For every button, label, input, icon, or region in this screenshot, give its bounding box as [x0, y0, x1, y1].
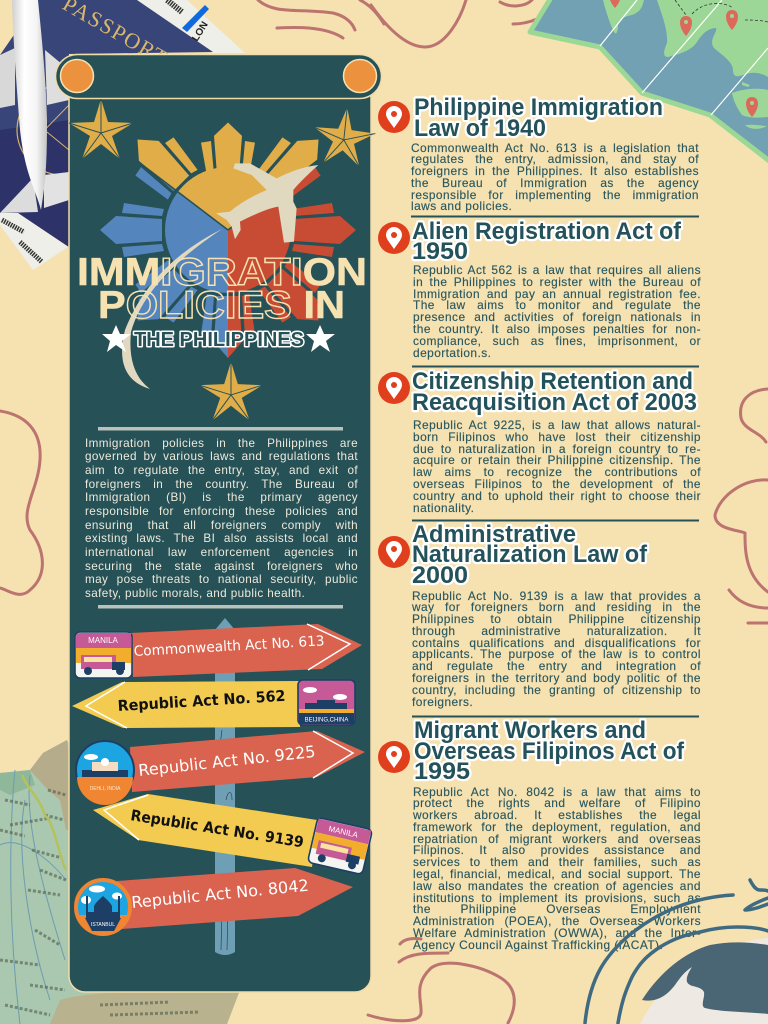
text: act 2003: acquire or retain their Philippine citizenship. The [413, 453, 701, 467]
heading 5: 1995 [414, 758, 470, 785]
heading 5 [414, 717, 685, 785]
icon: gold star bottom [200, 362, 262, 420]
icon: airplane [216, 163, 318, 243]
text: act 1940: responsible for implementing the immigration [411, 188, 699, 202]
scroll cap right button [344, 60, 376, 92]
text: act 1950: the country. It also imposes penalties for non- [413, 322, 701, 336]
map: bottom left [0, 740, 240, 1024]
text: act 1950: Republic Act 562 is a law that requires all aliens [413, 263, 701, 277]
heading 2 [412, 218, 682, 265]
text: act 2000 [412, 588, 701, 709]
text: act 2000: way for foreigners born and residing in the [412, 600, 701, 614]
text: act 1995: legal, financial, medical, and social support. The [413, 867, 701, 881]
heading 3: Reacquisition Act of 2003 [412, 389, 697, 416]
text: act 2000: foreigners. [412, 695, 473, 709]
text: act 1995: workers abroad. It establishes the legal [413, 808, 701, 822]
intro text: aim to regulate the entry, stay, and exit of [85, 464, 358, 477]
text: act 2000: Philippines to obtain Philippine citizenship [412, 612, 701, 626]
divider top [98, 427, 343, 430]
badge: manila tilted: MANILA [328, 824, 359, 840]
text: act 1950: compliance, such as fines, imprisonment, or [413, 334, 701, 348]
text: act 2000: Republic Act No. 9139 is a law that provides a [412, 588, 701, 602]
heading 1 [414, 94, 663, 142]
sign 2 [72, 681, 300, 728]
badge: delhi: DEHLI, INDIA [90, 786, 121, 792]
text: act 1950: presence and activities of foreign nationals in [413, 310, 701, 324]
text: act 2003: Republic Act 9225, is a law that allows natural- [413, 418, 701, 432]
sign 4: Republic Act No. 9139 [129, 806, 305, 851]
text: act 1950: deportation.s. [413, 346, 491, 360]
icon: location pin 1 [378, 101, 410, 133]
heading 5: Migrant Workers and [414, 717, 646, 744]
text: act 1940: regulates the entry, admission, and stay of [411, 152, 699, 166]
sign 1: Commonwealth Act No. 613 [133, 633, 325, 660]
text: act 1950: in the Philippines to register with the Bureau of [413, 275, 701, 289]
divider bottom [98, 605, 343, 608]
icon: location pin 4 [378, 536, 410, 568]
heading 1: Philippine Immigration [414, 94, 663, 121]
title: THE PHILIPPINES [134, 329, 304, 351]
text: act 1995: services to them and their families, such as [413, 855, 701, 869]
text: act 1950 [413, 263, 701, 360]
badge: delhi [76, 741, 134, 805]
heading 3 [412, 368, 697, 416]
passport and boarding passes: LON [190, 20, 211, 44]
text: act 2003: law aims to recognize the contributions of [413, 465, 701, 479]
text: act 2003 [413, 418, 701, 515]
intro text: securing the state against foreigners who [85, 560, 358, 573]
badge: manila tilted [308, 817, 372, 875]
text: act 1950: Immigration and pay an annual registration fee. [413, 287, 701, 301]
text: act 1995 [412, 784, 701, 952]
heading 4: Naturalization Law of [412, 541, 648, 568]
heading 1: Law of 1940 [414, 115, 546, 142]
intro text: safety, public morals, and public health. [85, 587, 305, 600]
text: act 1940: Commonwealth Act No. 613 is a legislation that [411, 140, 699, 154]
icon: location pin 3 [378, 372, 410, 404]
intro text: foreigners in the country. The Bureau of [85, 478, 358, 491]
passport and boarding passes [0, 0, 245, 270]
text: act 1940: foreigners in the Philippines. It also establishes [411, 164, 699, 178]
text: act 1995: framework for the deployment, regulation, and [413, 820, 701, 834]
globe bottom right [640, 938, 768, 1024]
divider rules [411, 216, 699, 716]
heading 4 [412, 521, 648, 589]
heading 4: Administrative [412, 521, 576, 548]
intro text: governed by various laws and regulations that [85, 450, 358, 463]
text: act 2003: born Filipinos who have lost their citizenship [413, 430, 701, 444]
title: POLICIES IN [98, 284, 345, 327]
text: act 1995: Republic Act No. 8042 is a law that aims to [413, 784, 701, 798]
chart: signpost [72, 618, 372, 955]
sign 4 [93, 794, 317, 867]
text: act 1995: Agency Council Against Trafficking (IACAT). [413, 938, 663, 952]
icon: location pin 2 [378, 222, 410, 254]
heading 3: Citizenship Retention and [412, 368, 693, 395]
text: act 1940 [411, 140, 699, 213]
heading 2: Alien Registration Act of [412, 218, 682, 245]
intro text: responsible for enforcing these policies and [85, 505, 358, 518]
heading 5: Overseas Filipinos Act of [414, 738, 685, 765]
badge: beijing [298, 680, 355, 725]
text: act 1995: the Philippine Overseas Employment [413, 902, 701, 916]
text: act 1995: law also mandates the creation of agencies and [413, 879, 701, 893]
icon: location pin 5 [378, 741, 410, 773]
panel: dark banner [56, 54, 382, 992]
text: act 2003: overseas Filipinos to the development of the [413, 477, 701, 491]
text: act 1995: repatriation of migrant workers and overseas [413, 832, 701, 846]
text: act 1940: the Bureau of Immigration as the agency [411, 176, 699, 190]
text: act 2003: nationality. [413, 501, 474, 515]
sign 1 [130, 624, 362, 677]
text: act 1995: Filipinos. It also provides assistance and [413, 843, 701, 857]
text: act 2000: through administrative naturalization. It [412, 624, 701, 638]
text: act 1995: Welfare Administration (OWWA), and the Inter- [413, 926, 701, 940]
intro text: Immigration policies in the Philippines are [85, 436, 358, 450]
text: act 1995: Administration (POEA), the Overseas Workers [413, 914, 701, 928]
text: act 2000: foreigners in the territory and body politic of the [412, 671, 701, 685]
text: act 1995: protect the rights and welfare of Filipino [413, 796, 701, 810]
intro text: Immigration (BI) is the primary agency [85, 491, 358, 504]
text: act 2000: and regulate the entry and integration of [412, 659, 701, 673]
scroll cap [56, 54, 382, 98]
intro text: ensuring that all foreigners comply with [85, 519, 358, 532]
title: IMMIGRATI ON [77, 251, 367, 294]
text: act 2000: contains qualifications and disqualifications for [412, 636, 701, 650]
text: act 1940: laws and policies. [411, 199, 512, 213]
icon: gold star left [69, 99, 133, 159]
heading 2: 1950 [412, 238, 468, 265]
badge: istanbul: ISTANBUL [91, 922, 115, 928]
icon: gold star right [311, 104, 378, 168]
icon: flight trail [122, 229, 222, 389]
sign 3 [130, 731, 365, 792]
badge: beijing: BEIJING,CHINA [305, 718, 348, 724]
icon: philippine sun [100, 120, 356, 358]
badge: manila: MANILA [88, 636, 119, 645]
map: top right [530, 0, 768, 163]
scroll cap left button [60, 60, 94, 92]
intro text: may pose threats to national security, public [85, 573, 358, 586]
heading 4: 2000 [412, 562, 468, 589]
text: act 1950: The law aims to monitor and regulate the [413, 298, 701, 312]
icon: plane outline bottom right [745, 880, 768, 910]
text: act 2000: applicants. The purpose of the law is to control [412, 647, 701, 661]
sign 5: Republic Act No. 8042 [131, 876, 310, 912]
sign 5 [117, 868, 353, 929]
intro text [85, 436, 358, 600]
pole [215, 618, 235, 955]
text: act 2003: due to naturalization in a foreign country to re- [413, 442, 701, 456]
badge: istanbul [76, 880, 130, 934]
sign 2: Republic Act No. 562 [117, 687, 286, 715]
text: act 2003: country and to uphold their right to choose their [413, 489, 701, 503]
intro text: existing laws. The BI also assists local and [85, 532, 358, 545]
text: act 2000: country, including the granting of citizenship to [412, 683, 701, 697]
text: act 1995: institutions to implement its provisions, such as [413, 891, 701, 905]
badge: manila [75, 632, 132, 678]
sign 3: Republic Act No. 9225 [137, 742, 316, 780]
intro text: international law enforcement agencies in [85, 546, 358, 559]
title [77, 251, 367, 352]
